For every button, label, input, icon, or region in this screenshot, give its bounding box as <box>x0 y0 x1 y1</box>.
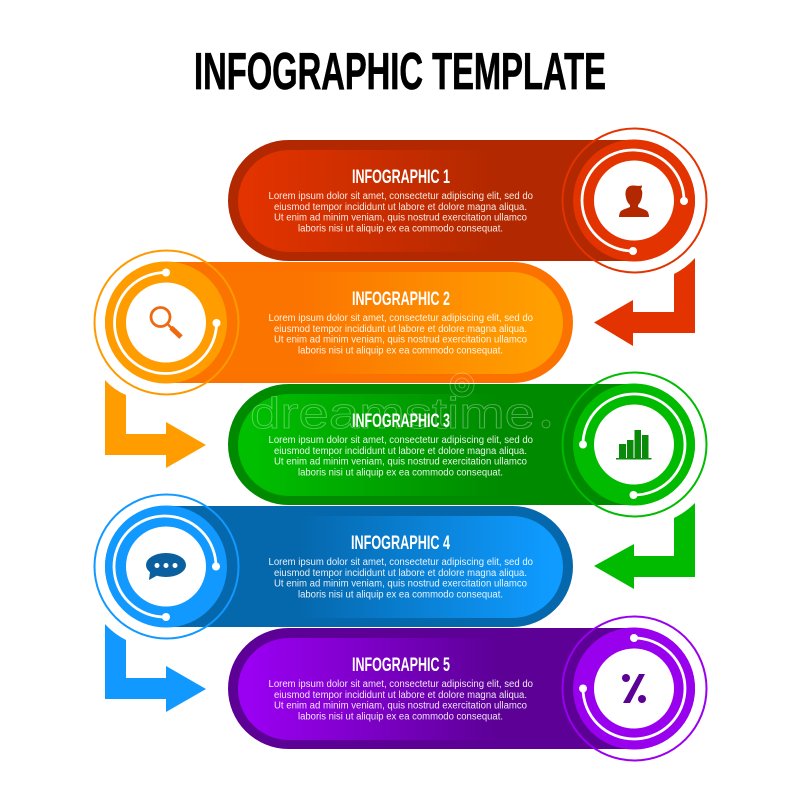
badge: infographic 3 <box>562 372 706 516</box>
heading: infographic 4: INFOGRAPHIC 4 <box>351 532 450 554</box>
panel: infographic 5 <box>228 628 695 749</box>
panel: infographic 2 <box>105 262 573 383</box>
text block: infographic 1: laboris nisi ut aliquip ex ea commodo consequat. <box>298 224 503 234</box>
arrow: red, step 1 to 2 <box>594 258 695 346</box>
heading: infographic 3: INFOGRAPHIC 3 <box>352 410 450 432</box>
badge: infographic 1 <box>562 128 706 272</box>
text block: infographic 3: eiusmod tempor incididunt ut labore et dolore magna aliqua. <box>274 446 527 457</box>
watermark <box>250 373 550 438</box>
text block: infographic 4: Lorem ipsum dolor sit amet, consectetur adipiscing elit, sed do <box>268 557 533 568</box>
panel: infographic 1 <box>228 140 695 261</box>
heading: infographic 2: INFOGRAPHIC 2 <box>352 288 450 310</box>
text block: infographic 4: Ut enim ad minim veniam, quis nostrud exercitation ullamco <box>274 578 527 590</box>
text block: infographic 1: eiusmod tempor incididunt ut labore et dolore magna aliqua. <box>274 202 527 213</box>
text block: infographic 1: Lorem ipsum dolor sit amet, consectetur adipiscing elit, sed do <box>268 191 533 202</box>
arrow: blue, step 4 to 5 <box>105 624 206 712</box>
icon: magnifier <box>151 308 181 337</box>
text block: infographic 3 <box>268 435 533 478</box>
heading: infographic 5: INFOGRAPHIC 5 <box>352 654 450 676</box>
text block: infographic 4: laboris nisi ut aliquip ex ea commodo consequat. <box>298 590 503 600</box>
watermark: dreamstime <box>250 389 535 438</box>
text block: infographic 2 <box>268 313 533 356</box>
text block: infographic 1: Ut enim ad minim veniam, quis nostrud exercitation ullamco <box>274 212 527 224</box>
arrow: orange, step 2 to 3 <box>105 380 206 468</box>
text block: infographic 1 <box>268 191 533 234</box>
text block: infographic 2: Ut enim ad minim veniam, quis nostrud exercitation ullamco <box>274 334 527 346</box>
text block: infographic 3: laboris nisi ut aliquip ex ea commodo consequat. <box>298 468 503 478</box>
heading: infographic 1: INFOGRAPHIC 1 <box>352 166 450 188</box>
text block: infographic 2: Lorem ipsum dolor sit amet, consectetur adipiscing elit, sed do <box>268 313 533 324</box>
panel: infographic 3 <box>228 373 695 505</box>
text block: infographic 2: laboris nisi ut aliquip ex ea commodo consequat. <box>298 346 503 356</box>
text block: infographic 5 <box>268 679 533 722</box>
arrow: green, step 3 to 4 <box>594 503 695 589</box>
text block: infographic 5: laboris nisi ut aliquip ex ea commodo consequat. <box>298 712 503 722</box>
text block: infographic 5: Ut enim ad minim veniam, quis nostrud exercitation ullamco <box>274 700 527 712</box>
badge: infographic 4 <box>94 494 238 638</box>
text block: infographic 4: eiusmod tempor incididunt ut labore et dolore magna aliqua. <box>274 568 527 579</box>
icon: bar chart <box>616 430 652 460</box>
icon: speech bubble <box>146 553 186 580</box>
text block: infographic 3: Ut enim ad minim veniam, quis nostrud exercitation ullamco <box>274 456 527 468</box>
text block: infographic 5: Lorem ipsum dolor sit amet, consectetur adipiscing elit, sed do <box>268 679 533 690</box>
icon: person <box>619 185 649 217</box>
icon: percent <box>622 674 646 703</box>
text block: infographic 5: eiusmod tempor incididunt ut labore et dolore magna aliqua. <box>274 690 527 701</box>
panel: infographic 4 <box>105 506 573 627</box>
badge: infographic 5 <box>562 616 706 760</box>
badge: infographic 2 <box>94 250 238 394</box>
text block: infographic 4 <box>268 557 533 600</box>
text block: infographic 2: eiusmod tempor incididunt ut labore et dolore magna aliqua. <box>274 324 527 335</box>
text block: infographic 3: Lorem ipsum dolor sit amet, consectetur adipiscing elit, sed do <box>268 435 533 446</box>
